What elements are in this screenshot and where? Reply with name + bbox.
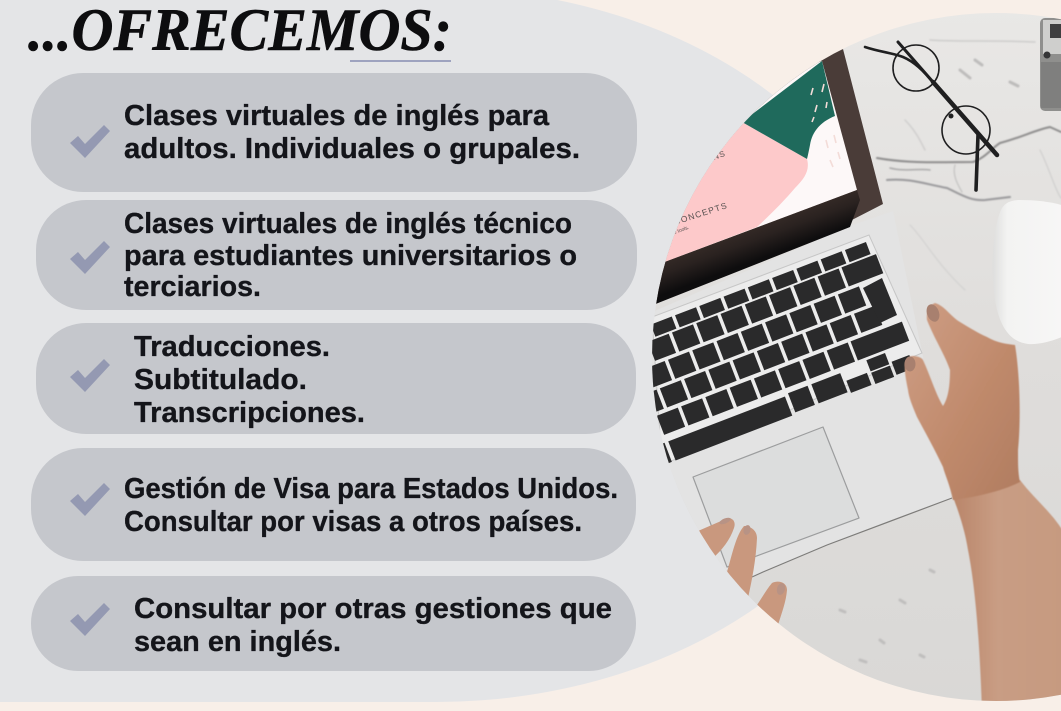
- title underline: [350, 60, 451, 62]
- text: adult classes: adultos. Individuales o grupales.: [124, 133, 580, 165]
- icon: check mark: [70, 603, 110, 636]
- laptop screen: [666, 61, 857, 262]
- base edge: [752, 498, 952, 577]
- icon: check mark: [70, 241, 110, 274]
- screen label: NS: NS: [712, 149, 727, 162]
- text: technical classes: Clases virtuales de inglés técnico: [124, 208, 572, 240]
- icon: mouse: [993, 200, 1061, 344]
- photo: laptop on marble desk: [652, 13, 1061, 701]
- laptop: [652, 49, 952, 578]
- text: visa: Gestión de Visa para Estados Unidos.: [124, 473, 618, 505]
- forearm: [953, 480, 1061, 711]
- keyboard keys: [652, 242, 910, 463]
- left hand fingers: [698, 518, 787, 625]
- panel: technical classes: [36, 200, 637, 310]
- left hand nails: [719, 516, 786, 596]
- pill: [31, 73, 637, 192]
- keyboard well outline: [652, 235, 922, 465]
- text: other procedures: sean en inglés.: [134, 626, 341, 658]
- laptop hinge band: [653, 190, 860, 305]
- text: translations: Traducciones.: [134, 331, 330, 363]
- marble desk: [640, 0, 1061, 711]
- text: other procedures: [134, 593, 612, 658]
- icon: check mark: [70, 125, 110, 158]
- icon: check mark: [70, 483, 110, 516]
- pill: [31, 576, 636, 671]
- text: translations: Transcripciones.: [134, 397, 365, 429]
- laptop lid: [640, 49, 883, 312]
- finger two: [727, 526, 757, 598]
- screen white base: [666, 61, 857, 262]
- panel: other procedures: [31, 576, 636, 671]
- right hand: [905, 303, 1020, 500]
- text: adult classes: Clases virtuales de inglés para: [124, 100, 550, 132]
- pill: [31, 448, 636, 561]
- marble veins: [840, 40, 1061, 662]
- text: visa: [124, 473, 618, 538]
- screen pink shape: [666, 123, 808, 262]
- fingernails: [904, 302, 942, 372]
- text: visa: Consultar por visas a otros países.: [124, 506, 582, 538]
- icon: check mark: [70, 359, 110, 392]
- screen green shape: [742, 61, 835, 159]
- icon: glasses: [865, 42, 997, 190]
- return key: [863, 278, 897, 323]
- text: technical classes: [124, 208, 577, 303]
- screen label: small caption: one tools.: [668, 225, 690, 238]
- finger one: [698, 518, 735, 558]
- text: translations: [134, 331, 365, 429]
- trackpad: [693, 427, 859, 567]
- text: other procedures: Consultar por otras gestiones que: [134, 593, 612, 625]
- text: technical classes: terciarios.: [124, 271, 261, 303]
- panel: adult classes: [31, 73, 637, 192]
- panel: translations: [36, 323, 636, 434]
- finger three: [757, 582, 787, 625]
- text: technical classes: para estudiantes universitarios o: [124, 240, 577, 272]
- screen label: concepts: CONCEPTS: [673, 200, 729, 227]
- screen dashes: [811, 84, 840, 167]
- text: translations: Subtitulado.: [134, 364, 307, 396]
- pill: [36, 323, 636, 434]
- laptop base: [653, 360, 952, 576]
- panel: visa: [31, 448, 636, 561]
- pill: [36, 200, 637, 310]
- icon: camera: [1040, 18, 1061, 111]
- text: adult classes: [124, 100, 580, 165]
